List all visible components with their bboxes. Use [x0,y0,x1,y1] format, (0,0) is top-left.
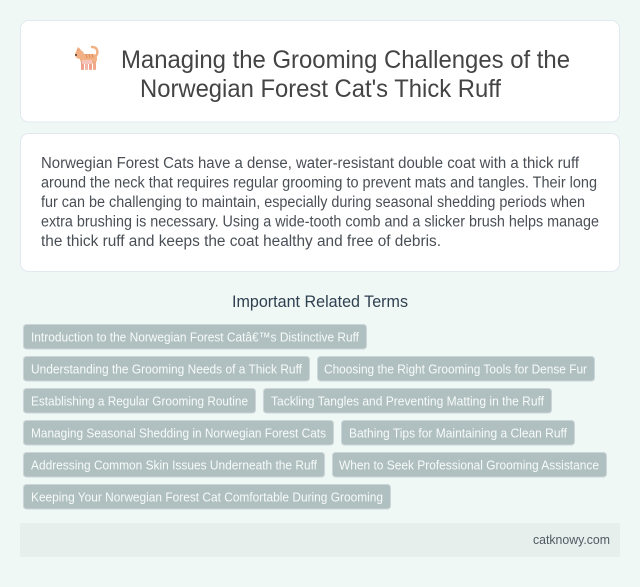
chip: tangles: Tackling Tangles and Preventing Matting in the Ruff [271,394,544,408]
title: Managing the Grooming Challenges of the [121,46,570,74]
chip: skin issues: Addressing Common Skin Issues Underneath the Ruff [31,458,317,472]
chip: grooming needs: Understanding the Grooming Needs of a Thick Ruff [31,362,302,376]
panel: term chips [24,324,606,509]
text block: intro: extra brushing is necessary. Using a wide-tooth comb and a slicker brush helps manage [41,214,599,230]
text block: intro: the thick ruff and keeps the coat healthy and free of debris. [41,233,441,250]
footer: site name: catknowy.com [533,532,610,547]
chip: tangles [264,388,552,413]
chip: comfort: Keeping Your Norwegian Forest Cat Comfortable During Grooming [31,490,383,504]
chip: skin issues [24,452,324,477]
panel: intro text [20,134,620,272]
footer [20,523,620,557]
text block: intro: around the neck that requires regular grooming to prevent mats and tangles. Their long [41,174,597,192]
chip: bathing [342,420,574,445]
icon: cat [75,47,97,70]
chip: grooming needs [24,356,310,381]
chip: professional help: When to Seek Professional Grooming Assistance [339,458,599,472]
chip: professional help [332,452,606,477]
chip: shedding [24,420,334,445]
text block: intro: Norwegian Forest Cats have a dense, water-resistant double coat with a thick ruff [41,155,580,172]
chip: comfort [24,484,390,509]
title: Norwegian Forest Cat's Thick Ruff [140,75,501,103]
chip: grooming tools: Choosing the Right Grooming Tools for Dense Fur [324,362,588,376]
heading: related terms: Important Related Terms [232,293,408,311]
chip: bathing: Bathing Tips for Maintaining a Clean Ruff [349,426,567,440]
chip: ruff introduction [24,324,366,349]
chip: routine: Establishing a Regular Grooming Routine [31,394,248,408]
panel: title card [20,20,620,122]
chip: ruff introduction: Introduction to the Norwegian Forest Catâ€™s Distinctive Ruff [31,330,359,344]
chip: routine [24,388,256,413]
text block: intro [41,155,599,250]
title [121,46,570,103]
chip: grooming tools [318,356,594,381]
chip: shedding: Managing Seasonal Shedding in Norwegian Forest Cats [31,426,326,440]
text block: intro: fur can be challenging to maintain, especially during seasonal shedding periods when [41,194,585,211]
